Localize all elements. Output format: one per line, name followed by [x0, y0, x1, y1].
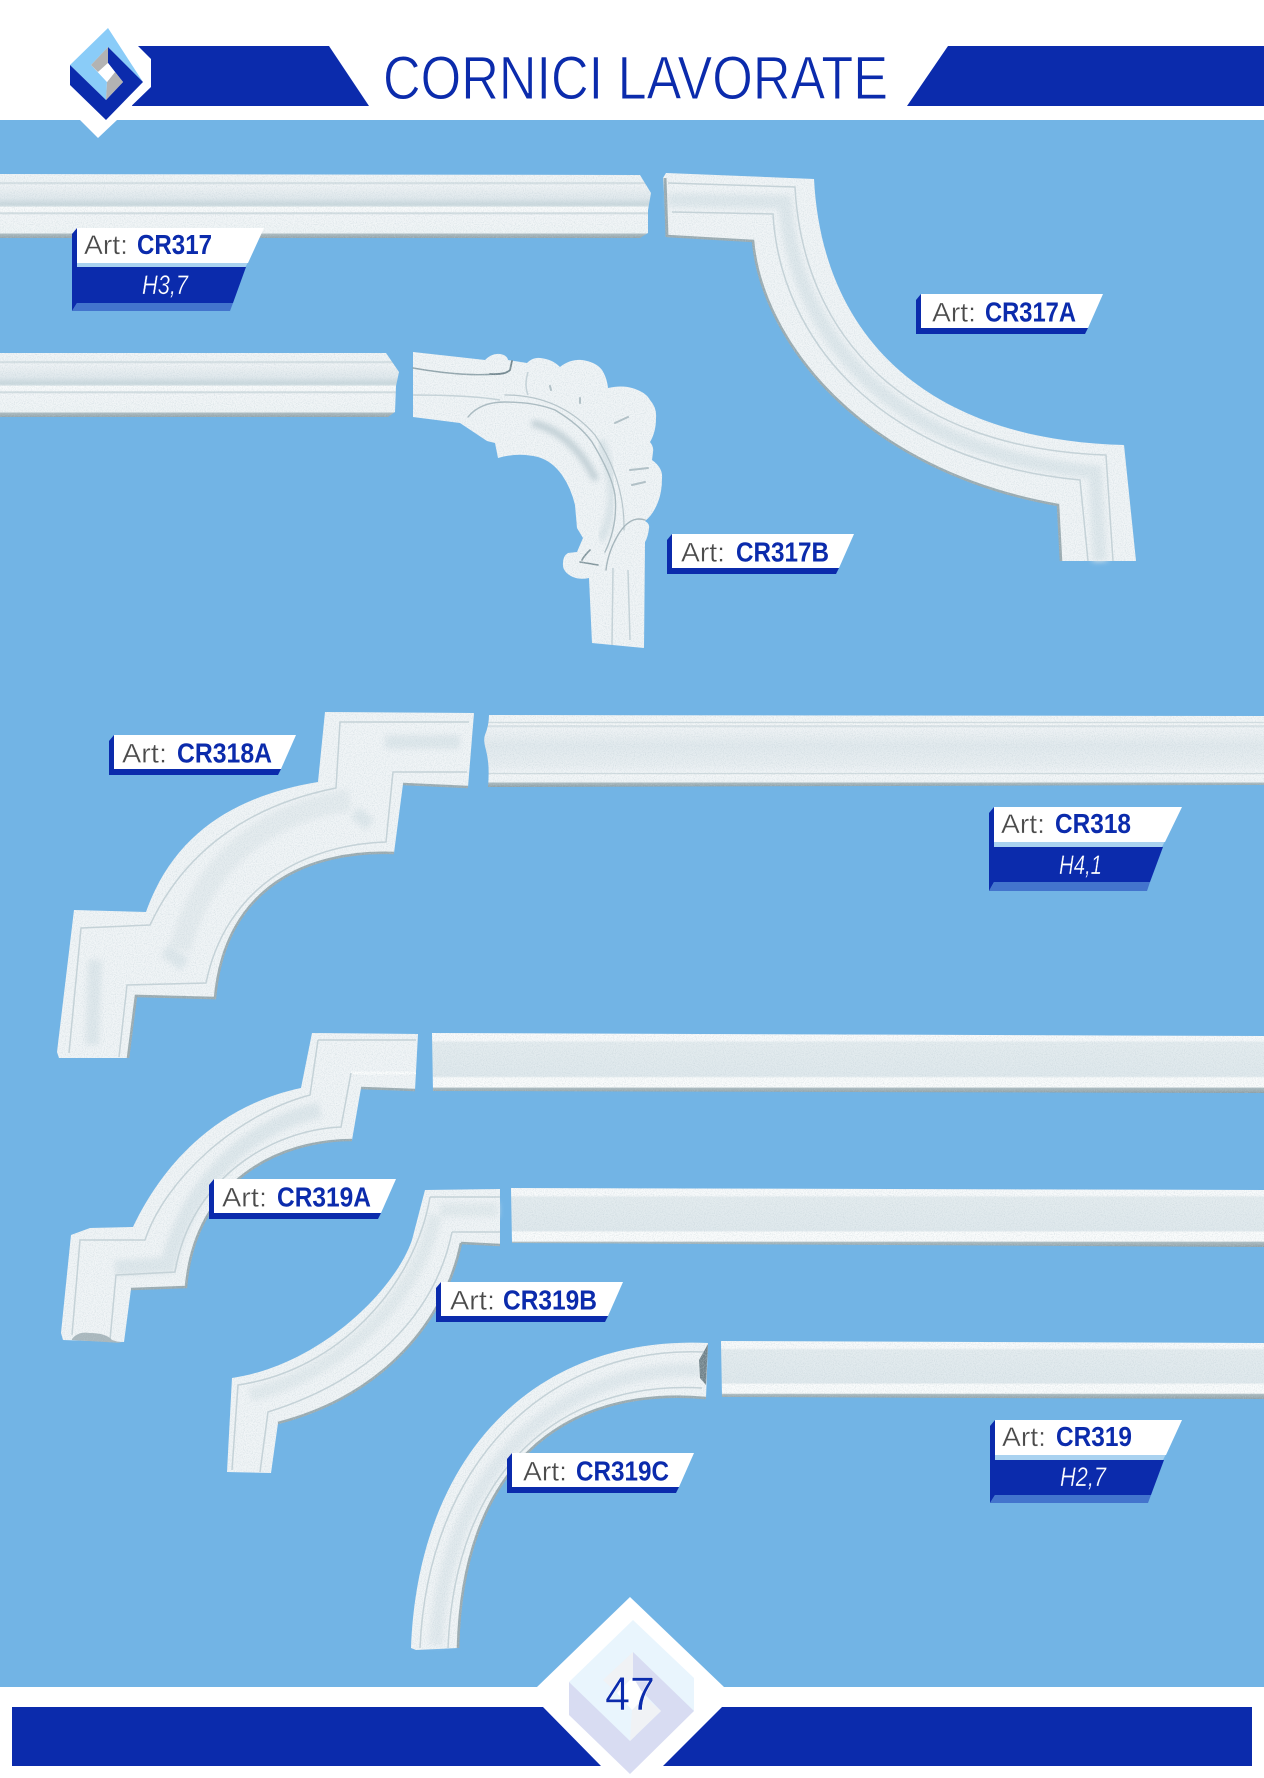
molding: CR319 straight upper	[432, 1033, 1264, 1093]
page number: 47	[605, 1667, 655, 1720]
label: CR317: Art:	[84, 230, 128, 260]
page badge	[569, 1620, 694, 1774]
footer white band	[0, 1687, 1264, 1778]
label: CR319: Art:	[1002, 1422, 1046, 1452]
molding: CR317 straight	[0, 174, 651, 238]
molding: CR319B corner	[227, 1189, 500, 1473]
label: CR317A	[916, 294, 1103, 334]
molding: CR319 straight middle	[511, 1188, 1264, 1247]
label: CR319C: Art:	[523, 1456, 567, 1486]
footer diamond	[537, 1597, 724, 1778]
footer	[0, 1597, 1264, 1778]
label: CR317B: Art:	[681, 538, 725, 568]
molding: CR317B straight	[0, 353, 399, 417]
label: CR318A: CR318A	[177, 738, 272, 768]
label: CR319A: CR319A	[277, 1182, 371, 1212]
label: CR317B	[667, 534, 854, 574]
molding: CR319 straight lower	[721, 1341, 1264, 1399]
label: CR319: CR319	[1056, 1421, 1132, 1452]
label: CR317: H3,7	[142, 270, 189, 300]
label: CR319	[990, 1420, 1182, 1503]
label: CR318: H4,1	[1059, 850, 1102, 880]
label: CR319A: Art:	[222, 1182, 267, 1212]
label: CR318: Art:	[1001, 809, 1045, 839]
label: CR317A: Art:	[932, 298, 976, 328]
molding: CR318 straight	[484, 715, 1264, 787]
label: CR318A: Art:	[122, 738, 167, 768]
header bar left	[132, 46, 369, 106]
label: CR319C	[507, 1453, 694, 1493]
label: CR318: CR318	[1055, 808, 1131, 839]
label: CR317B: CR317B	[736, 536, 829, 568]
header bar right	[907, 46, 1264, 106]
label: CR317A: CR317A	[985, 296, 1076, 328]
header	[132, 44, 1264, 112]
label: CR317: CR317	[137, 229, 212, 260]
label: CR318A	[109, 735, 296, 775]
label: CR318	[989, 807, 1182, 891]
label: CR319C: CR319C	[576, 1456, 669, 1486]
logo	[70, 28, 151, 138]
label: CR319B: Art:	[450, 1286, 495, 1316]
molding: CR317A corner	[663, 173, 1136, 561]
title: CORNICI LAVORATE	[383, 44, 888, 112]
molding: CR319A corner	[61, 1033, 418, 1343]
label: CR319: H2,7	[1060, 1462, 1107, 1492]
molding: CR318A corner	[57, 712, 474, 1058]
label: CR319B: CR319B	[503, 1284, 597, 1316]
footer bar	[12, 1707, 1252, 1766]
molding: CR319C corner	[411, 1343, 708, 1650]
molding: CR317B ornate corner	[413, 352, 662, 648]
label: CR319B	[436, 1282, 623, 1322]
label: CR319A	[209, 1179, 396, 1219]
label: CR317	[72, 228, 264, 311]
